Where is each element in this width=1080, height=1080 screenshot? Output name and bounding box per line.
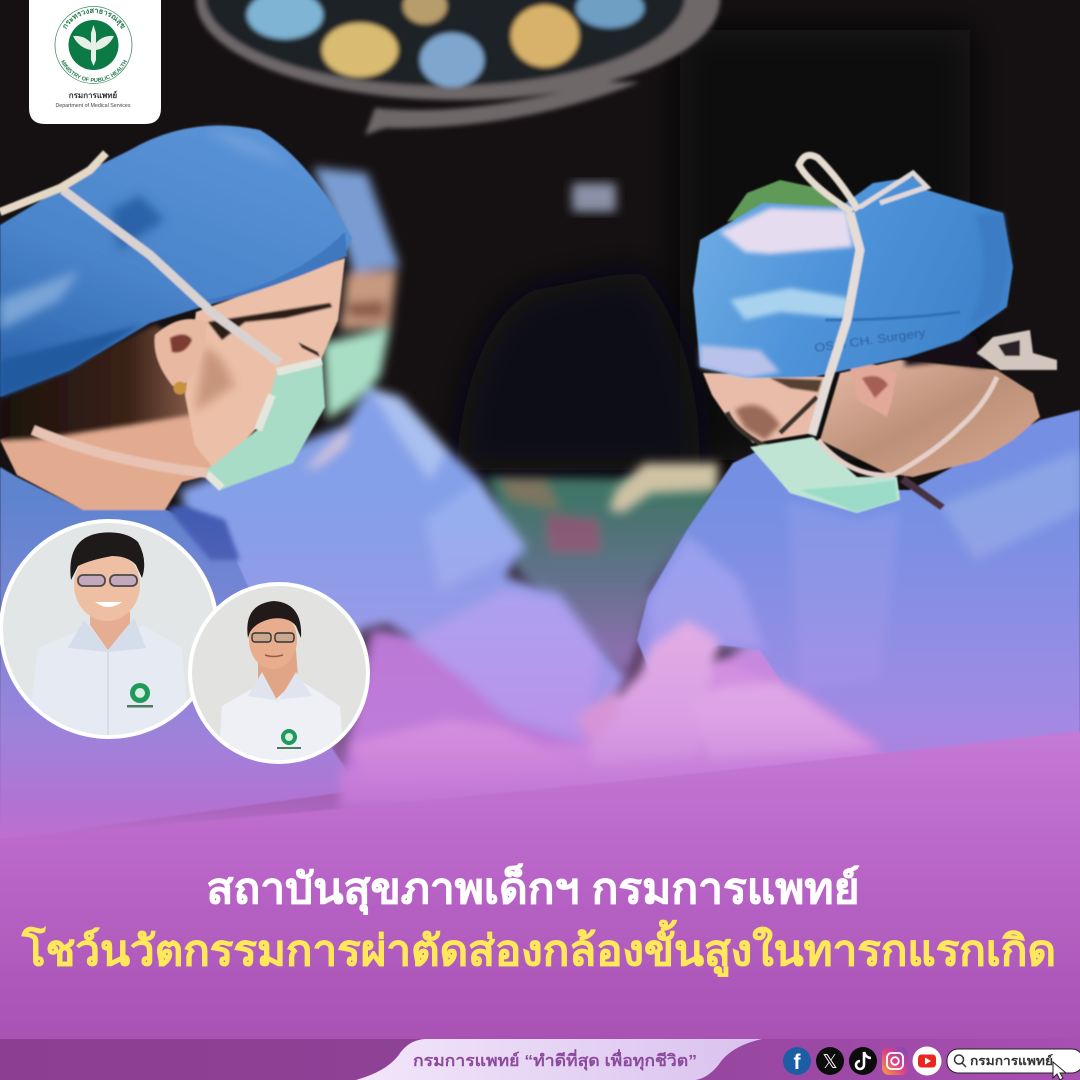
logo text: กรมการแพทย์	[69, 90, 118, 100]
footer slogan ribbon	[356, 1039, 762, 1080]
footer bar	[0, 1039, 1080, 1080]
gloves in foreground	[340, 620, 880, 810]
neck tie	[977, 330, 1057, 370]
middle surgeon	[180, 167, 626, 780]
curved title band	[0, 729, 1080, 1060]
face	[703, 373, 827, 443]
cap straps	[63, 190, 280, 363]
table	[340, 477, 790, 790]
icon: tiktok	[849, 1047, 877, 1075]
mask strap	[818, 377, 997, 475]
portrait: second doctor	[188, 582, 370, 770]
icon: facebook: f	[794, 1051, 802, 1074]
mask	[203, 360, 325, 490]
purple fade over photo	[0, 500, 1080, 840]
search box	[947, 1049, 1080, 1080]
emblem: ministry seal: MINISTRY OF PUBLIC HEALTH	[61, 60, 127, 82]
cap text: OSM CH. Surgery	[813, 326, 926, 355]
icon: X: 𝕏	[822, 1052, 838, 1073]
cap	[693, 177, 1013, 378]
phone light	[572, 183, 616, 212]
mask strap	[33, 430, 207, 473]
hair dark area behind ear	[905, 335, 985, 368]
icon: facebook	[783, 1047, 811, 1075]
icon: youtube	[912, 1046, 942, 1076]
title: line two: โชว์นวัตกรรมการผ่าตัดส่องกล้องขั้นสูงในทารกแรกเกิด	[21, 919, 1056, 977]
icon: X	[816, 1047, 844, 1075]
ear	[155, 319, 207, 387]
neck	[0, 360, 230, 510]
gown	[637, 410, 1080, 770]
emblem: ministry seal	[54, 6, 132, 84]
cap	[0, 126, 352, 397]
logo card: Department of Medical Services	[55, 103, 131, 109]
right surgeon	[637, 155, 1080, 770]
green hair	[727, 180, 837, 222]
glove: far hand	[609, 463, 719, 513]
ear	[850, 365, 897, 417]
neck	[820, 360, 1040, 477]
glasses	[727, 397, 817, 450]
face	[185, 258, 345, 470]
search box: กรมการแพทย์	[970, 1054, 1053, 1068]
icon: cursor	[1053, 1062, 1066, 1080]
logo card	[29, 0, 161, 124]
cap ties	[799, 155, 858, 212]
background people silhouettes	[455, 270, 700, 470]
icon: instagram	[882, 1047, 908, 1075]
portrait: first doctor	[0, 515, 220, 745]
emblem: ministry seal: กระทรวงสาธารณสุข	[63, 8, 126, 29]
title: line one: สถาบันสุขภาพเด็กฯ กรมการแพทย์	[206, 863, 860, 915]
surgical lamp	[196, 0, 720, 135]
mask	[750, 437, 900, 513]
footer slogan ribbon: กรมการแพทย์ “ทำดีที่สุด เพื่อทุกชีวิต”	[413, 1049, 697, 1071]
left surgeon	[0, 126, 360, 840]
hair behind ear	[0, 325, 215, 440]
gown	[0, 467, 360, 840]
